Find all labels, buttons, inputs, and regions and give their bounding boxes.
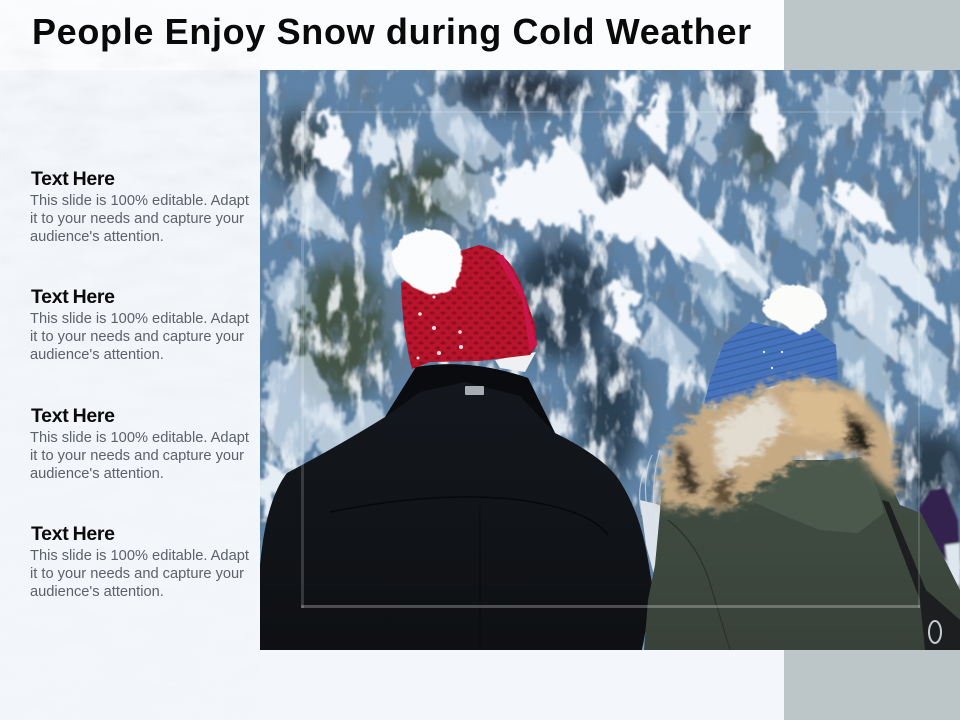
text block 4: [30, 523, 249, 600]
text block 2: This slide is 100% editable. Adapt: [30, 311, 249, 327]
text block 2: [30, 286, 249, 363]
text block 3: it to your needs and capture your: [30, 448, 244, 464]
woman: green jacket: [644, 457, 960, 650]
text block 3: This slide is 100% editable. Adapt: [30, 430, 249, 446]
text block 4: it to your needs and capture your: [30, 566, 244, 582]
text block 2: Text Here: [31, 286, 115, 308]
grey corner block bottom: [784, 650, 960, 720]
hat stitches: [416, 296, 463, 360]
photo: couple in snowy forest: [260, 70, 960, 650]
woman: blue hat: [704, 285, 838, 405]
photo frame overlay: [301, 111, 920, 608]
bag strap: [882, 500, 960, 650]
red hat pompom: [392, 229, 462, 294]
text block 1: audience's attention.: [30, 229, 164, 245]
coat label: [465, 386, 484, 395]
man: red hat: [392, 229, 537, 372]
grey corner block top: [784, 0, 960, 70]
man: black coat: [260, 364, 653, 650]
text block 1: This slide is 100% editable. Adapt: [30, 193, 249, 209]
text block 1: it to your needs and capture your: [30, 211, 244, 227]
text block 4: This slide is 100% editable. Adapt: [30, 548, 249, 564]
woman: fur hood: [657, 377, 898, 510]
text block 3: [30, 405, 249, 482]
blue hat pompom: [763, 285, 827, 335]
text block 3: Text Here: [31, 405, 115, 427]
text block 3: audience's attention.: [30, 466, 164, 482]
text block 2: it to your needs and capture your: [30, 329, 244, 345]
text block 4: Text Here: [31, 523, 115, 545]
text block 1: Text Here: [31, 168, 115, 190]
text block 4: audience's attention.: [30, 584, 164, 600]
title: People Enjoy Snow during Cold Weather: [32, 11, 752, 52]
text block 2: audience's attention.: [30, 347, 164, 363]
person in background: [918, 488, 960, 585]
snow on branches: [262, 72, 958, 525]
hair between the couple: [640, 450, 664, 575]
forest backdrop: [260, 70, 960, 650]
snow background texture: [230, 74, 235, 76]
text block 1: [30, 168, 249, 245]
